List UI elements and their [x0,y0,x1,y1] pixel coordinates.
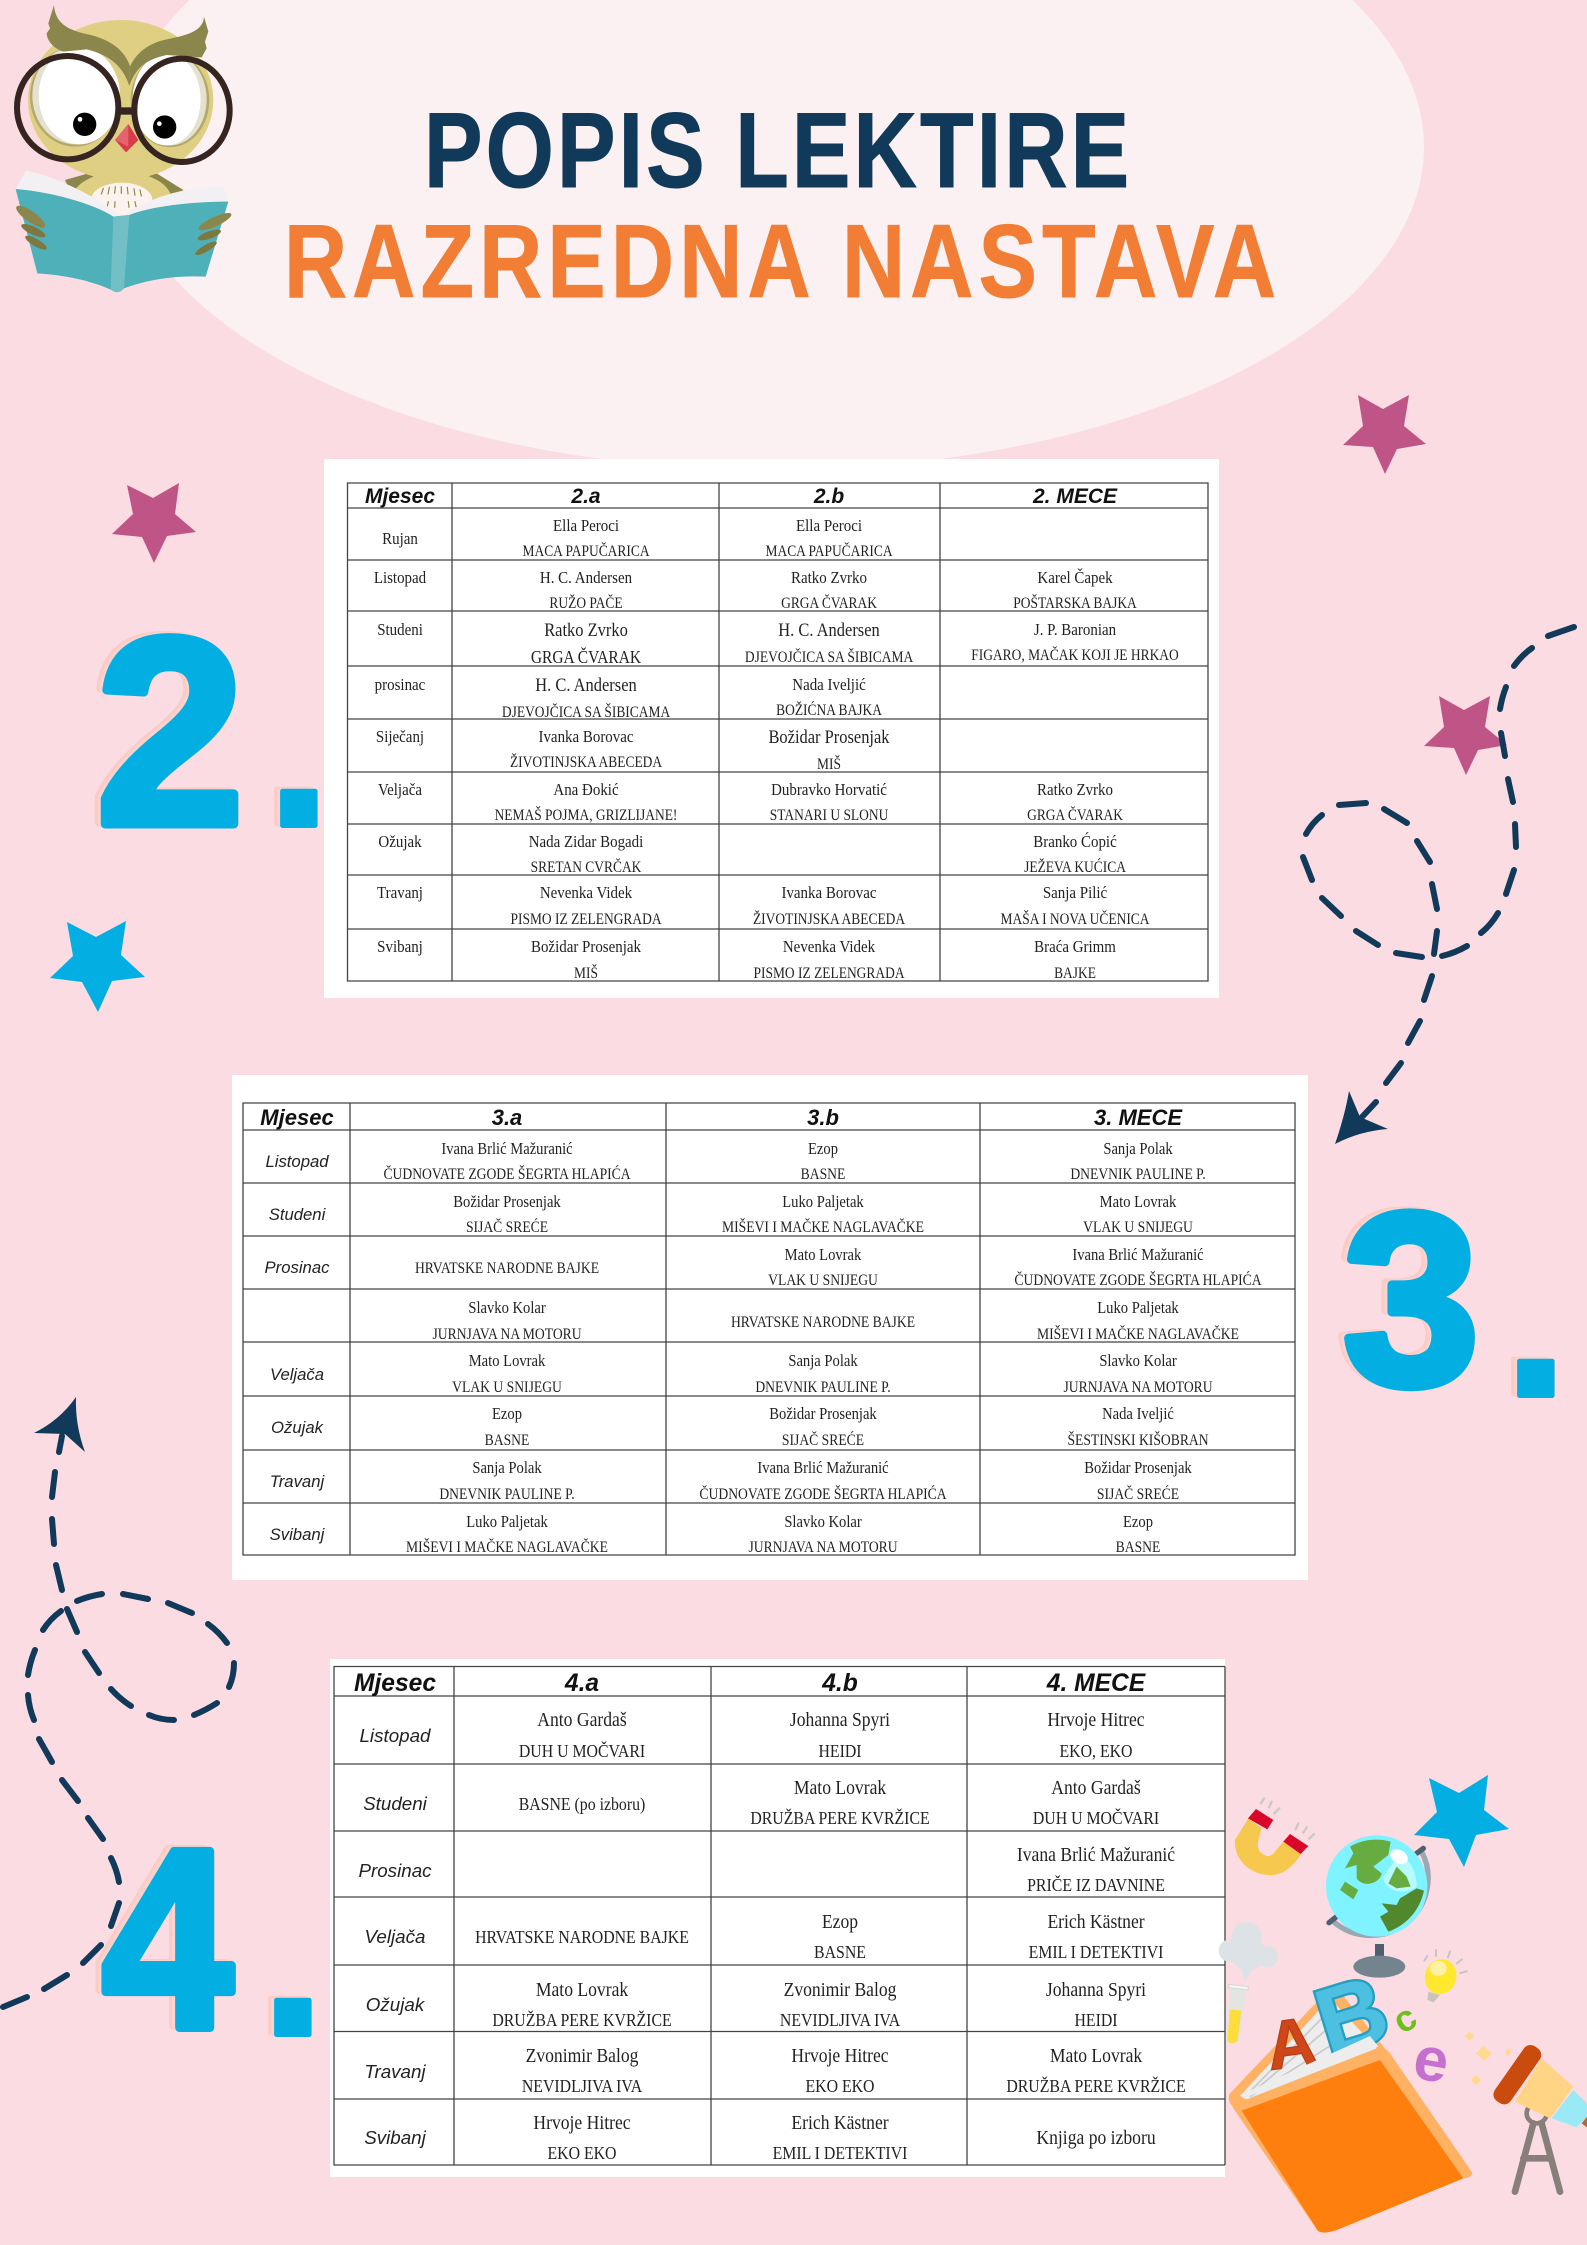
row: Listopad: Ezop [808,1140,838,1158]
numeral: 3.: 3 [1343,1162,1479,1436]
row: Ožujak [366,1979,1146,2030]
row: Travanj: ČUDNOVATE ZGODE ŠEGRTA HLAPIĆA [699,1485,947,1503]
row: Svibanj [270,1513,1160,1556]
row: Veljača: Veljača [365,1926,425,1947]
row: Svibanj: EMIL I DETEKTIVI [773,2143,908,2163]
row: Studeni: DJEVOJČICA SA ŠIBICAMA [745,648,914,666]
row: Veljača: Veljača [270,1365,324,1384]
row: Listopad: Ivana Brlić Mažuranić [441,1140,573,1158]
icon: pink star right [1424,696,1507,775]
row: Svibanj [377,938,1116,982]
row: Studeni [269,1193,1193,1236]
row: Veljača: STANARI U SLONU [770,807,889,824]
row: Listopad: Listopad [265,1152,329,1171]
row: Svibanj: Slavko Kolar [784,1513,863,1531]
row: Svibanj: BASNE [1116,1539,1160,1556]
row: Listopad: BASNE [801,1166,845,1183]
row: Rujan: Ella Peroci [796,517,863,535]
letter e: e [1409,2023,1454,2097]
row: Ožujak: SRETAN CVRČAK [531,858,642,876]
panel: grade 2 reading table [324,459,1219,998]
row: Travanj: NEVIDLJIVA IVA [522,2076,643,2096]
header row: grade 4: Mjesec [354,1670,436,1697]
row: prosinac [375,674,882,721]
row: Veljača: NEMAŠ POJMA, GRIZLIJANE! [495,806,677,824]
row: Svibanj: Hrvoje Hitrec [533,2112,631,2134]
row: Studeni: BASNE (po izboru) [519,1794,645,1814]
row: Studeni: Studeni [269,1205,327,1224]
row: Travanj: Zvonimir Balog [526,2045,639,2067]
row: Siječanj: MIŠ [817,755,841,773]
row: prosinac: DJEVOJČICA SA ŠIBICAMA [502,703,671,721]
row: Listopad: GRGA ČVARAK [781,594,878,612]
row: Prosinac: Mato Lovrak [785,1246,861,1264]
icon: owl reading a book [13,5,233,292]
row: Svibanj: Svibanj [270,1525,326,1544]
row: Ožujak [378,831,1127,876]
row: Ožujak: Nada Iveljić [1102,1405,1174,1423]
row: Travanj: Sanja Pilić [1043,884,1107,902]
row: Travanj: DRUŽBA PERE KVRŽICE [1006,2076,1186,2096]
row: Studeni: FIGARO, MAČAK KOJI JE HRKAO [971,646,1179,664]
row: Svibanj: Ezop [1123,1513,1153,1531]
row: Travanj: EKO EKO [805,2076,875,2096]
row: Listopad: Johanna Spyri [790,1709,890,1731]
row: Studeni: MIŠEVI I MAČKE NAGLAVAČKE [722,1218,924,1236]
row: prosinac: H. C. Andersen [535,674,637,695]
row: Listopad: Karel Čapek [1037,567,1113,587]
row: Studeni: Luko Paljetak [782,1193,864,1211]
row: Studeni: DRUŽBA PERE KVRŽICE [750,1808,930,1828]
row: Studeni: Studeni [377,621,423,639]
row: Travanj: Hrvoje Hitrec [791,2045,889,2067]
row: Siječanj: Božidar Prosenjak [768,726,890,747]
row: Listopad: Sanja Polak [1103,1140,1173,1158]
row: Veljača: Slavko Kolar [1099,1352,1178,1370]
row: Rujan [382,517,893,560]
row: Listopad: Anto Gardaš [537,1709,627,1731]
header row: grade 3 [260,1105,1183,1130]
row: Svibanj: PISMO IZ ZELENGRADA [754,965,905,982]
row: unnamed month: Luko Paljetak [1097,1299,1179,1317]
row: Listopad: HEIDI [818,1741,862,1761]
row: Listopad: DUH U MOČVARI [519,1741,646,1761]
row: Listopad: POŠTARSKA BAJKA [1013,594,1137,612]
row: Veljača: DNEVNIK PAULINE P. [755,1379,891,1396]
arrow: dashed loop from grade 2 to grade 3 [1303,627,1574,1144]
numeral: 4.: . [261,1826,325,2084]
row: Svibanj: EKO EKO [547,2143,617,2163]
row: Ožujak: Ožujak [366,1994,426,2015]
row: Listopad: H. C. Andersen [540,569,632,587]
row: Svibanj: Božidar Prosenjak [531,938,641,956]
row: Travanj: MAŠA I NOVA UČENICA [1001,910,1150,928]
row: Ožujak: Nada Zidar Bogadi [529,833,644,851]
row: Svibanj: Luko Paljetak [466,1513,548,1531]
row: prosinac: prosinac [375,676,425,694]
row: Svibanj: Svibanj [377,938,423,956]
row: Studeni [377,619,1179,667]
title: popis lektire: POPIS LEKTIRE [424,90,1132,210]
numeral: 4. [102,1796,325,2084]
row: Ožujak: DRUŽBA PERE KVRŽICE [492,2010,672,2030]
row: Travanj: Mato Lovrak [1050,2045,1143,2067]
row: Veljača: VLAK U SNIJEGU [452,1379,562,1396]
illustration: school items around an open book [1219,1798,1587,2232]
row: Travanj [364,2045,1186,2096]
row: Ožujak: Zvonimir Balog [784,1979,897,2001]
letter c: c [1385,1996,1424,2042]
numeral: 3. [1343,1162,1568,1444]
panel: grade 3 reading table [232,1075,1308,1580]
row: Prosinac: HRVATSKE NARODNE BAJKE [415,1260,599,1277]
row: Veljača: Veljača [378,781,422,799]
row: Ožujak: JEŽEVA KUĆICA [1024,858,1127,876]
row: Veljača: Dubravko Horvatić [771,781,887,799]
row: Listopad: RUŽO PAČE [549,594,623,612]
row: Veljača: Erich Kästner [1047,1911,1145,1933]
row: prosinac: Nada Iveljić [792,676,866,694]
row: unnamed month: Slavko Kolar [468,1299,547,1317]
row: Svibanj: JURNJAVA NA MOTORU [748,1539,898,1556]
header row: grade 2: 2.a [570,485,601,508]
row: Svibanj: Knjiga po izboru [1036,2127,1156,2149]
row: Listopad: DNEVNIK PAULINE P. [1070,1166,1206,1183]
icon: pink star left [112,483,196,563]
row: Ožujak: Johanna Spyri [1046,1979,1146,2001]
row: Prosinac: PRIČE IZ DAVNINE [1027,1875,1165,1895]
row: Listopad: EKO, EKO [1060,1741,1132,1761]
row: Travanj: Ivana Brlić Mažuranić [757,1459,889,1477]
row: Ožujak: Ožujak [378,833,422,851]
row: Travanj: ŽIVOTINJSKA ABECEDA [753,910,906,928]
row: Studeni: H. C. Andersen [778,619,880,640]
row: Veljača: BASNE [814,1942,866,1962]
icon: light bulb [1421,1950,1467,2003]
row: Ožujak [271,1405,1209,1449]
row: Travanj: DNEVNIK PAULINE P. [439,1486,575,1503]
row: Listopad: Ratko Zvrko [791,569,867,587]
row: Listopad: Listopad [374,569,426,587]
row: Prosinac: Ivana Brlić Mažuranić [1017,1844,1175,1866]
numeral: 3.: . [1504,1188,1568,1444]
icon: magnet [1235,1798,1314,1875]
row: Veljača: Ratko Zvrko [1037,781,1113,799]
row: Ožujak: ŠESTINSKI KIŠOBRAN [1067,1431,1209,1449]
row: Svibanj: Erich Kästner [791,2112,889,2134]
row: Prosinac [265,1246,1262,1289]
row: Prosinac: VLAK U SNIJEGU [768,1272,878,1289]
row: Ožujak: Branko Ćopić [1033,831,1117,851]
row: Studeni: J. P. Baronian [1034,621,1116,639]
row: Veljača [270,1352,1213,1396]
icon: open orange book [1229,1955,1472,2232]
row: Ožujak: Božidar Prosenjak [769,1405,877,1423]
row: Listopad [359,1709,1145,1761]
numeral: 2.: 2 [96,582,244,881]
header background ellipse [118,0,1424,470]
icon: telescope with stars [1465,2032,1587,2192]
numeral: 2.: . [267,618,331,874]
arrow: dashed loop from grade 4 to grade 3 [3,1397,234,2007]
row: Travanj: PISMO IZ ZELENGRADA [511,911,662,928]
icon: blue star bottom right [1414,1775,1509,1867]
row: Svibanj: BAJKE [1054,965,1096,982]
row: Siječanj: Siječanj [376,728,424,746]
row: Travanj: Travanj [270,1472,325,1491]
row: Siječanj: Ivanka Borovac [538,728,634,746]
header row: grade 2: Mjesec [365,485,435,508]
header row: grade 2 [365,485,1118,508]
row: Svibanj: Svibanj [364,2127,427,2148]
row: Rujan: MACA PAPUČARICA [523,542,650,560]
row: Ožujak: Ezop [492,1405,522,1423]
row: Studeni: GRGA ČVARAK [531,647,641,667]
row: Rujan: Ella Peroci [553,517,620,535]
numeral: 2. [96,582,331,881]
row: Rujan: Rujan [382,530,418,548]
header row: grade 2: 2. MECE [1032,485,1118,508]
row: Travanj [377,884,1150,928]
numeral: 4.: 4 [102,1796,233,2083]
panel: grade 4 reading table [330,1659,1225,2177]
row: Ožujak: NEVIDLJIVA IVA [780,2010,901,2030]
header row: grade 4: 4.b [821,1670,858,1697]
row: prosinac: BOŽIĆNA BAJKA [776,701,882,719]
row: Studeni: VLAK U SNIJEGU [1083,1219,1193,1236]
row: Travanj [270,1459,1192,1503]
row: Travanj: Nevenka Videk [540,884,632,902]
row: Ožujak: HEIDI [1074,2010,1118,2030]
row: Listopad: Hrvoje Hitrec [1047,1709,1145,1731]
row: unnamed month: HRVATSKE NARODNE BAJKE [731,1314,915,1331]
row: Svibanj: MIŠ [574,964,598,982]
row: unnamed month [432,1299,1239,1343]
row: Listopad [265,1140,1206,1183]
row: Veljača [365,1911,1164,1962]
row: Listopad [374,567,1137,612]
header row: grade 4: 4. MECE [1046,1670,1147,1697]
row: Travanj: Travanj [377,884,423,902]
row: Studeni: Mato Lovrak [794,1777,887,1799]
icon: test tube with smoke [1219,1922,1278,2044]
row: Studeni: Ratko Zvrko [544,619,628,640]
row: Veljača: Ana Đokić [553,781,619,799]
row: Veljača: HRVATSKE NARODNE BAJKE [475,1927,689,1947]
row: unnamed month: JURNJAVA NA MOTORU [432,1326,582,1343]
row: Studeni: Studeni [363,1793,428,1814]
row: Veljača: Ezop [822,1911,858,1933]
row: Veljača: Mato Lovrak [469,1352,545,1370]
row: unnamed month: MIŠEVI I MAČKE NAGLAVAČKE [1037,1325,1239,1343]
letter B: B [1303,1955,1400,2077]
row: Svibanj: Nevenka Videk [783,938,875,956]
icon: pink star top right [1343,395,1426,474]
letter A: A [1262,2003,1321,2085]
row: Svibanj: MIŠEVI I MAČKE NAGLAVAČKE [406,1538,608,1556]
row: Prosinac: Prosinac [358,1860,432,1881]
header row: grade 4 [354,1670,1147,1697]
row: Ožujak: BASNE [485,1432,529,1449]
row: Studeni: Anto Gardaš [1051,1777,1141,1799]
row: Travanj: Božidar Prosenjak [1084,1459,1192,1477]
row: Svibanj: Braća Grimm [1034,938,1116,956]
row: Veljača: GRGA ČVARAK [1027,806,1124,824]
header row: grade 4: 4.a [564,1670,599,1697]
row: Ožujak: SIJAČ SREĆE [782,1431,864,1449]
row: Listopad: Listopad [359,1725,431,1746]
row: Ožujak: Mato Lovrak [536,1979,629,2001]
row: Rujan: MACA PAPUČARICA [766,542,893,560]
header row: grade 3: Mjesec [260,1105,334,1130]
header row: grade 3: 3.a [492,1105,522,1130]
row: Veljača: JURNJAVA NA MOTORU [1063,1379,1213,1396]
row: Listopad: ČUDNOVATE ZGODE ŠEGRTA HLAPIĆA [383,1165,631,1183]
row: Travanj: SIJAČ SREĆE [1097,1485,1179,1503]
header row: grade 2: 2.b [813,485,844,508]
row: Studeni: SIJAČ SREĆE [466,1218,548,1236]
row: Travanj: Ivanka Borovac [781,884,877,902]
header row: grade 3: 3.b [807,1105,839,1130]
row: Prosinac: ČUDNOVATE ZGODE ŠEGRTA HLAPIĆA [1014,1271,1262,1289]
row: Studeni [363,1777,1160,1828]
row: Prosinac: Ivana Brlić Mažuranić [1072,1246,1204,1264]
row: Siječanj: ŽIVOTINJSKA ABECEDA [510,753,663,771]
row: Studeni: Božidar Prosenjak [453,1193,561,1211]
subtitle: razredna nastava: RAZREDNA NASTAVA [284,204,1281,320]
row: Svibanj [364,2112,1156,2163]
icon: blue star left [50,921,145,1012]
row: Studeni: Mato Lovrak [1100,1193,1176,1211]
row: Veljača: Sanja Polak [788,1352,858,1370]
row: Veljača [378,781,1124,824]
row: Siječanj [376,726,890,773]
row: Travanj: Sanja Polak [472,1459,542,1477]
row: Prosinac: Prosinac [265,1258,330,1277]
row: Studeni: DUH U MOČVARI [1033,1808,1160,1828]
icon: globe [1326,1835,1428,1978]
header row: grade 3: 3. MECE [1094,1105,1183,1130]
row: Veljača: EMIL I DETEKTIVI [1029,1942,1164,1962]
title block [284,90,1281,320]
row: Prosinac [358,1844,1175,1895]
row: Ožujak: Ožujak [271,1418,325,1437]
row: Travanj: Travanj [364,2061,426,2082]
